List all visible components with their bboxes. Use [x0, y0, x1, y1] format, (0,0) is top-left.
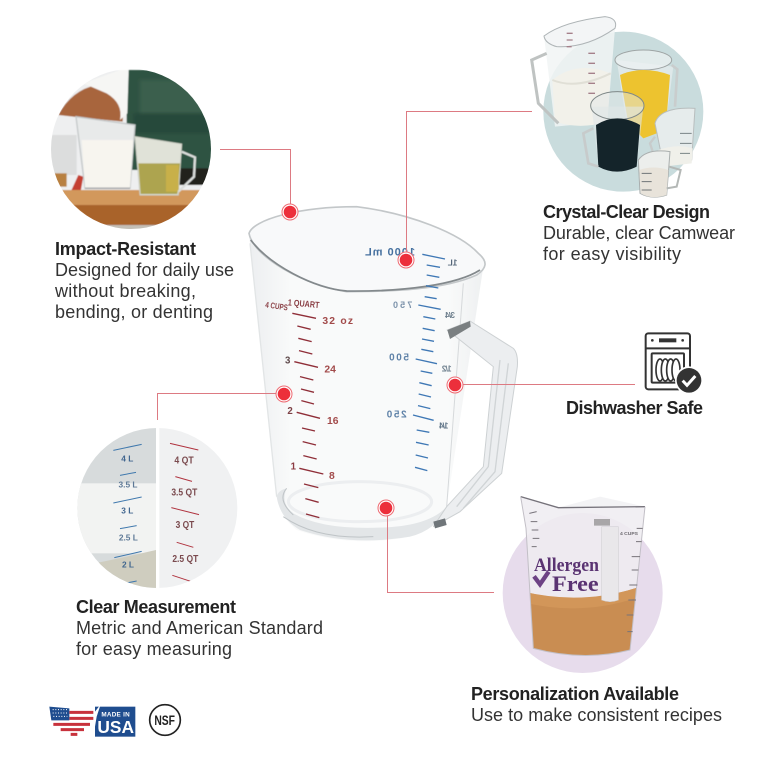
- icon: dishwasher with check: [646, 333, 703, 394]
- cup with yellow oil: [615, 50, 677, 138]
- cup base: [277, 488, 447, 540]
- blue millilitre scale: 3/4: [445, 310, 455, 320]
- callout line: personalization: [388, 515, 494, 592]
- photo: impact-resistant cups on a cutting board: [47, 70, 217, 230]
- text: crystal-clear design: Durable, clear Camwear: [543, 223, 735, 243]
- logo: NSF: [150, 705, 180, 735]
- blue millilitre scale: 1L: [448, 257, 457, 267]
- photo: metric and American scale close-up: [77, 427, 239, 590]
- backdrop circle: [543, 32, 703, 192]
- metric scale labels: 2 L: [122, 559, 134, 569]
- red ounce scale: 4 CUPS: [265, 299, 289, 313]
- callout line: crystal-clear: [406, 112, 532, 253]
- text: personalization available: Personalization Available: [471, 684, 679, 704]
- allergen free label: Allergen: [534, 555, 600, 576]
- text: personalization available: [471, 684, 722, 725]
- text: impact-resistant: without breaking,: [54, 281, 196, 301]
- American scale labels: 3.5 QT: [171, 488, 197, 499]
- blue millilitre scale: 1/4: [439, 420, 448, 430]
- logo: made in USA: MADE IN: [101, 712, 130, 719]
- text: impact-resistant: [54, 239, 234, 322]
- allergen free label: [534, 555, 600, 596]
- American scale labels: 3 QT: [176, 520, 194, 531]
- text: clear measurement: [76, 597, 323, 659]
- text: clear measurement: Metric and American Standard: [76, 618, 323, 638]
- cup with milk: [532, 17, 616, 127]
- cup body: [249, 210, 483, 541]
- photo: crystal-clear cups with liquids: [532, 17, 703, 197]
- red ounce scale: 24: [324, 365, 336, 376]
- cup: 4 CUPS: [620, 531, 639, 537]
- small cup with white liquid: [638, 151, 681, 197]
- American scale labels: 2.5 QT: [172, 554, 198, 565]
- red ounce scale: [265, 297, 353, 518]
- metric scale labels: [113, 444, 142, 583]
- American scale labels: [170, 443, 199, 582]
- callout line: impact-resistant: [220, 150, 290, 205]
- text: impact-resistant: Impact-Resistant: [55, 239, 196, 259]
- text: impact-resistant: Designed for daily use: [55, 260, 234, 280]
- product: measuring cup: [249, 207, 517, 541]
- text: impact-resistant: bending, or denting: [55, 302, 213, 322]
- callout line: clear measurement: [158, 394, 278, 420]
- cup with dark liquid: [583, 92, 644, 172]
- blue millilitre scale: 1000 mL: [365, 246, 415, 258]
- text: clear measurement: for easy measuring: [76, 639, 232, 659]
- metric scale labels: 2.5 L: [119, 533, 138, 543]
- text: crystal-clear design: for easy visibility: [543, 244, 681, 264]
- allergen free label: Free: [552, 571, 599, 596]
- red ounce scale: 3: [285, 355, 291, 366]
- red ounce scale: 2: [287, 406, 293, 417]
- callout line: dishwasher safe: [455, 384, 635, 386]
- metric scale labels: 4 L: [121, 453, 133, 463]
- text: clear measurement: Clear Measurement: [76, 597, 236, 617]
- text: crystal-clear design: Crystal-Clear Design: [543, 202, 710, 222]
- cup interior: [249, 207, 485, 292]
- text: dishwasher safe: Dishwasher Safe: [566, 398, 703, 418]
- blue millilitre scale: 500: [389, 353, 409, 364]
- cup: [521, 497, 645, 658]
- red ounce scale: 1 QUART: [287, 297, 320, 310]
- American scale labels: 4 QT: [174, 455, 194, 466]
- clear cup: [650, 108, 695, 167]
- photo: allergen free personalised cup: [503, 497, 663, 673]
- red ounce scale: 32 oz: [322, 316, 353, 327]
- backdrop circle: [503, 513, 663, 673]
- metric scale labels: 3.5 L: [119, 480, 137, 490]
- handle: [433, 321, 517, 527]
- metric scale labels: 3 L: [121, 505, 133, 515]
- blue millilitre scale: [365, 246, 457, 471]
- text: crystal-clear design: [543, 202, 735, 264]
- blue millilitre scale: 750: [393, 300, 412, 310]
- blue millilitre scale: 1/2: [441, 364, 452, 374]
- red ounce scale: 1: [291, 462, 297, 473]
- logo: made in USA: [49, 704, 135, 737]
- red ounce scale: 8: [329, 471, 335, 482]
- marker dots: [276, 204, 463, 516]
- logo: NSF: NSF: [154, 712, 175, 728]
- logo: made in USA: USA: [97, 717, 134, 737]
- text: personalization available: Use to make consistent recipes: [471, 705, 722, 725]
- red ounce scale: 16: [327, 416, 339, 427]
- blue millilitre scale: 250: [386, 409, 407, 420]
